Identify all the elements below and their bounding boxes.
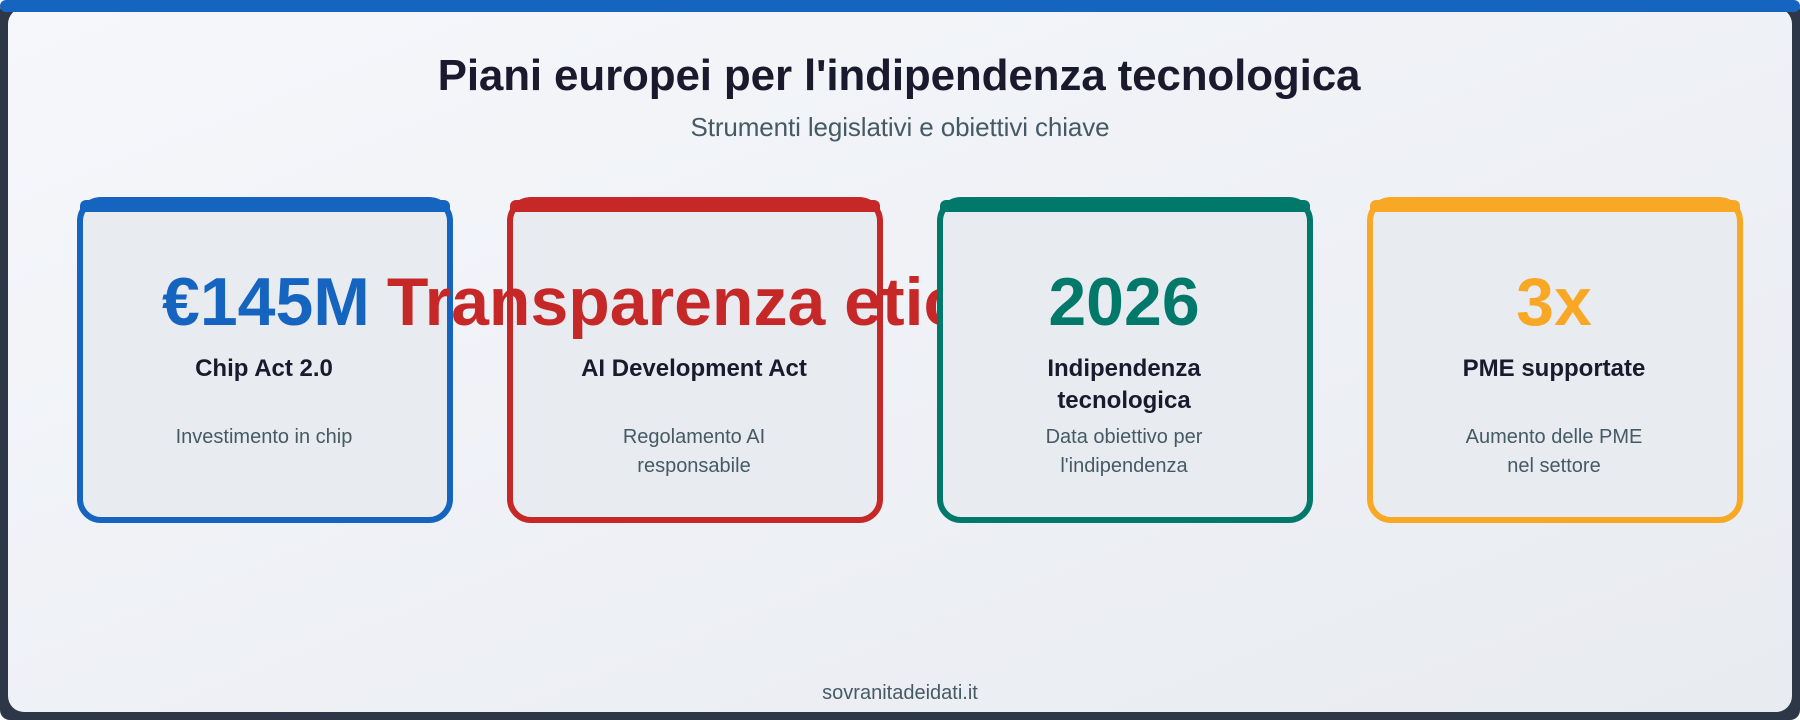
card heading: Chip Act 2.0 (195, 355, 333, 382)
card accent bar (510, 200, 880, 212)
card description line 2: responsabile (637, 455, 751, 477)
card: Indipendenza tecnologica (940, 200, 1310, 520)
card description line 2: l'indipendenza (1060, 455, 1188, 477)
card: AI Development Act (387, 200, 1000, 520)
card: Chip Act 2.0 (80, 200, 450, 520)
card accent bar (940, 200, 1310, 212)
stat value: 3x (1516, 264, 1592, 340)
card box (1370, 200, 1740, 520)
subtitle: Strumenti legislativi e obiettivi chiave (690, 112, 1110, 142)
stat value: 2026 (1048, 264, 1200, 340)
card description: Data obiettivo per (1046, 426, 1203, 448)
card box (80, 200, 450, 520)
card description line 2: nel settore (1507, 455, 1601, 477)
top accent bar (0, 0, 1800, 12)
stat value: €145M (162, 264, 370, 340)
card: PME supportate (1370, 200, 1740, 520)
card description: Aumento delle PME (1466, 426, 1642, 448)
footer source: sovranitadeidati.it (822, 682, 978, 704)
card accent bar (1370, 200, 1740, 212)
stat value: Transparenza etica (387, 264, 1000, 340)
card heading: Indipendenza (1047, 355, 1201, 382)
card heading: AI Development Act (581, 355, 807, 382)
card box (510, 200, 880, 520)
title: Piani europei per l'indipendenza tecnologica (438, 51, 1361, 100)
card description: Investimento in chip (176, 426, 352, 448)
card description: Regolamento AI (623, 426, 765, 448)
card box (940, 200, 1310, 520)
card heading: PME supportate (1463, 355, 1645, 382)
card heading line 2: tecnologica (1057, 387, 1191, 414)
card accent bar (80, 200, 450, 212)
